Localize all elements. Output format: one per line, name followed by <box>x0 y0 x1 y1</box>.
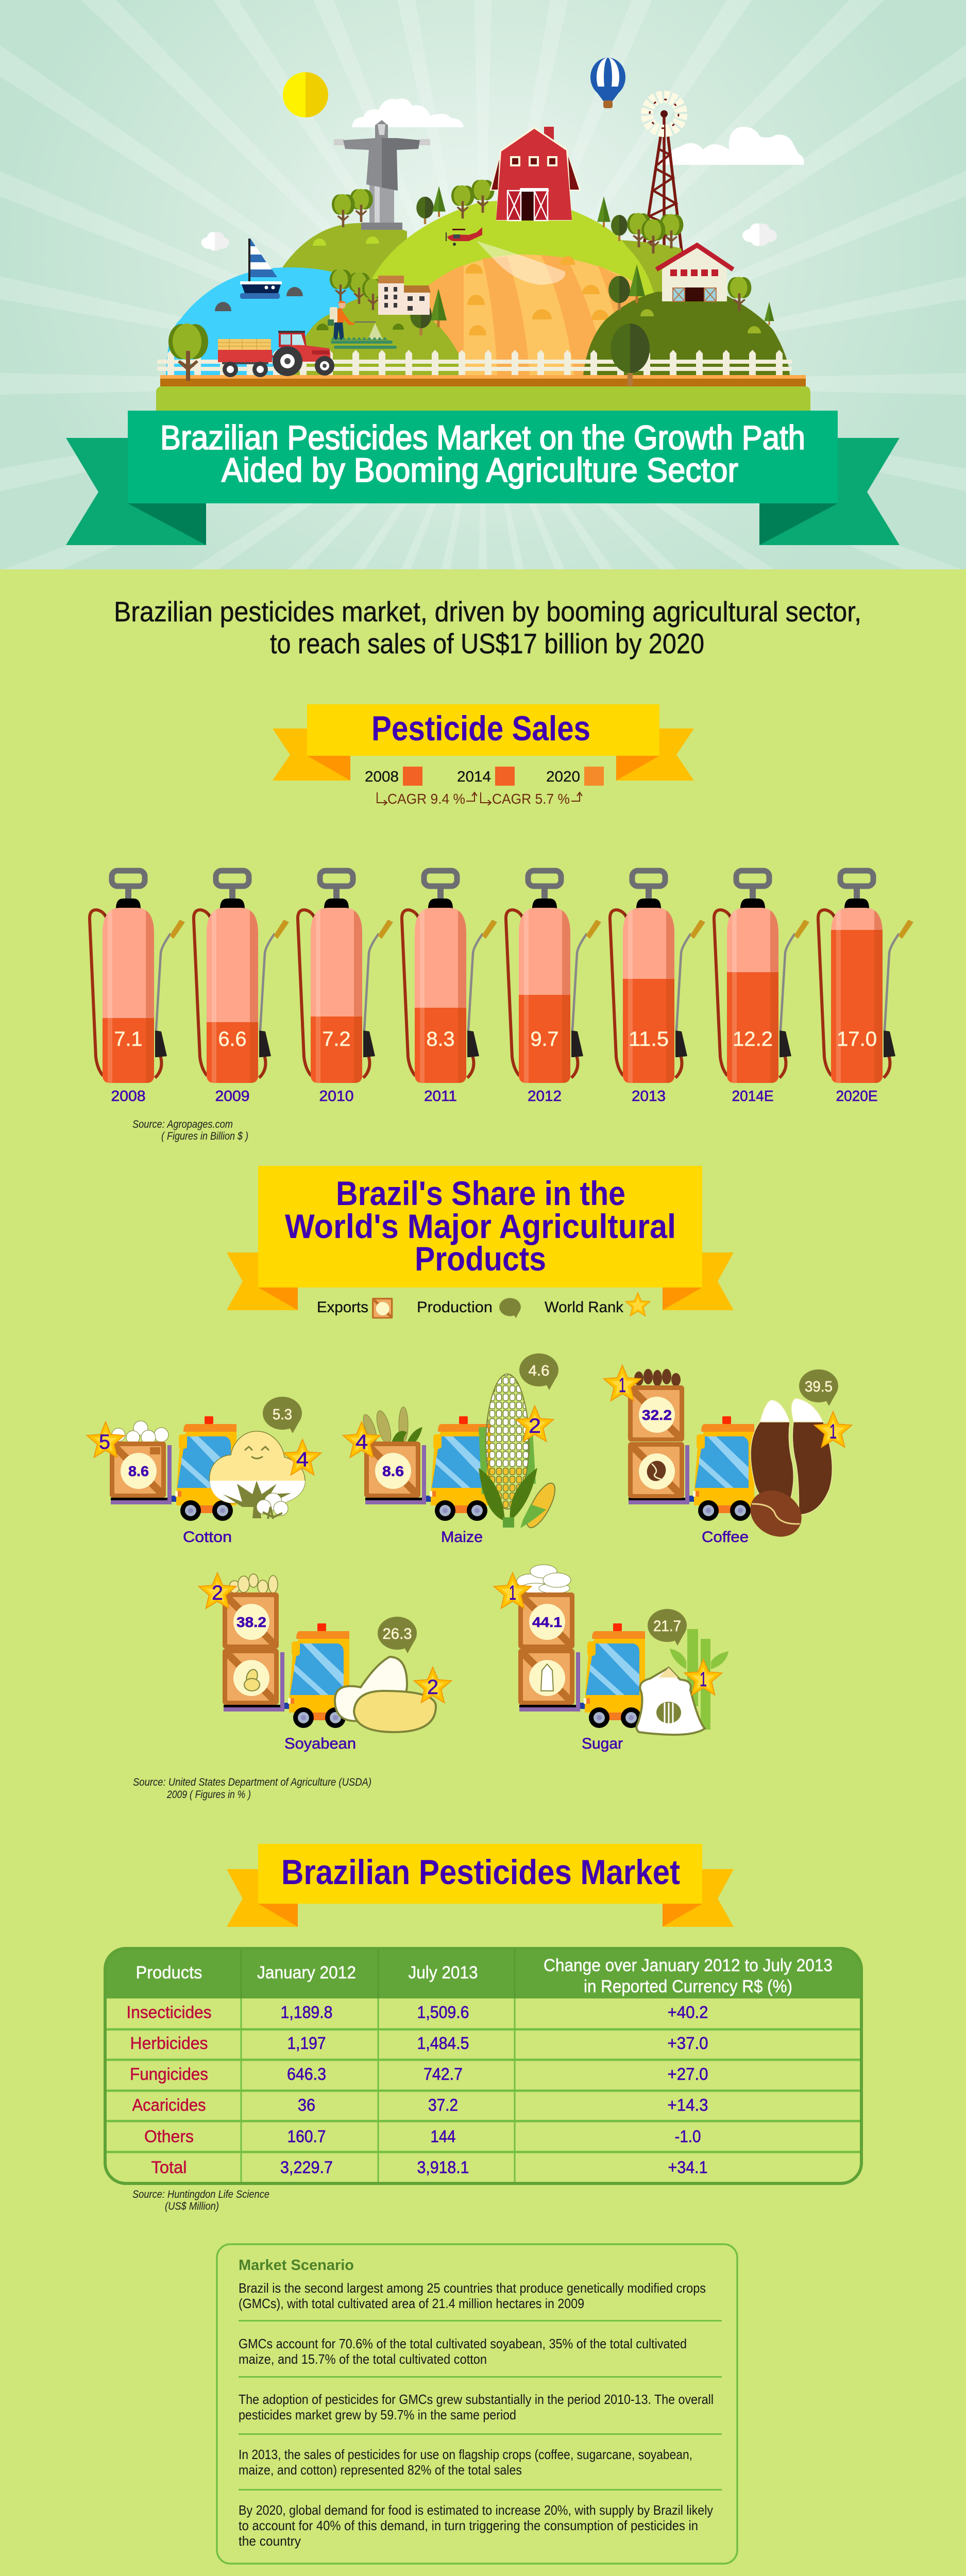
lower crate with soy icon <box>223 1649 279 1705</box>
production bubble: 39.5 <box>805 1379 833 1395</box>
rank star: production <box>516 1406 553 1442</box>
row: total: Total <box>151 2158 187 2177</box>
sprayer 2014E: 2014E <box>732 1088 774 1105</box>
small coffee bean <box>742 1482 810 1546</box>
legend: years: 2020 <box>546 769 580 785</box>
table header: July 2013 <box>408 1963 478 1982</box>
point 5: the country <box>239 2533 301 2549</box>
production bubble <box>799 1369 838 1406</box>
point 2 <box>239 2336 687 2367</box>
sprayer 2013: 2013 <box>632 1088 666 1105</box>
sugarcane <box>670 1629 728 1730</box>
dark right hill <box>583 292 790 375</box>
point 4: In 2013, the sales of pesticides for use on flagship crops (coffee, sugarcane, soyabean, <box>239 2447 692 2462</box>
biplane <box>446 227 482 246</box>
sprayer 2013: 11.5 <box>629 1028 669 1050</box>
heading: market scenario: Market Scenario <box>239 2257 354 2274</box>
product: coffee <box>604 1365 852 1546</box>
rank star: exports <box>604 1365 641 1401</box>
crate with exports value: 8.6 <box>128 1463 149 1479</box>
windmill tower <box>641 117 682 265</box>
crate with exports value <box>110 1442 166 1498</box>
source: Huntingdon: (US$ Million) <box>165 2200 219 2212</box>
row: acaricides <box>132 2095 708 2114</box>
sprayer 2011: 8.3 <box>427 1028 454 1050</box>
product: soyabean <box>199 1573 451 1752</box>
row: herbicides: +37.0 <box>668 2033 708 2053</box>
row: insecticides: +40.2 <box>668 2003 708 2022</box>
production bubble: 26.3 <box>382 1625 412 1642</box>
source: USDA: 2009 ( Figures in % ) <box>166 1789 251 1801</box>
corn cobs on crate <box>361 1407 422 1445</box>
hill mounds and rocks <box>215 236 761 333</box>
CAGR annotation: CAGR 9.4 % <box>387 791 465 807</box>
truck <box>519 1623 645 1728</box>
truck <box>629 1416 754 1521</box>
orange field <box>428 255 639 375</box>
rank star: exports: 1 <box>509 1582 516 1604</box>
product: maize: Maize <box>441 1529 483 1546</box>
panel: market scenario <box>217 2244 737 2564</box>
truck <box>224 1623 349 1728</box>
point 2: maize, and 15.7% of the total cultivated cotton <box>239 2351 487 2367</box>
ribbon tails <box>66 438 900 545</box>
subheading <box>114 596 861 659</box>
sprayer 2008: 2008 <box>111 1088 145 1105</box>
farmer spraying crops <box>328 301 383 340</box>
sky background with sun rays <box>0 0 966 569</box>
point 3 <box>239 2392 714 2422</box>
source: Huntingdon <box>132 2189 269 2212</box>
product: coffee: Coffee <box>702 1529 749 1546</box>
CAGR annotation: CAGR 5.7 % <box>492 791 570 807</box>
sprayer bar chart <box>90 871 913 1105</box>
point 1 <box>239 2280 706 2311</box>
rank star: exports: 5 <box>99 1431 110 1453</box>
upper crate with exports value: 32.2 <box>642 1407 672 1423</box>
soybean illustration <box>335 1657 436 1732</box>
row: others: -1.0 <box>675 2127 701 2146</box>
rank star: production: 1 <box>829 1420 837 1443</box>
rank star: production: 1 <box>700 1668 707 1691</box>
point 5: to account for 40% of this demand, in turn triggering the consumption of pesticides in <box>239 2518 698 2533</box>
small cloud right <box>742 224 777 246</box>
sprayer 2013 <box>610 871 705 1105</box>
cloud behind statue <box>352 98 464 127</box>
table frame <box>105 1948 861 2183</box>
sprayer 2011 <box>402 871 497 1105</box>
point 5 <box>239 2502 713 2549</box>
rank star: exports: 1 <box>619 1374 626 1397</box>
pesticide spray from plane <box>477 241 565 285</box>
point 4: maize, and cotton) represented 82% of the total sales <box>239 2462 522 2478</box>
point 3: pesticides market grew by 59.7% in the same period <box>239 2407 516 2422</box>
row: total <box>151 2158 708 2177</box>
tractor with hay trailer <box>218 331 334 377</box>
production bubble <box>648 1609 687 1646</box>
sprayer 2010 <box>298 871 393 1105</box>
legend: exports, production, world rank <box>317 1293 650 1318</box>
CAGR annotation <box>377 791 582 807</box>
product: maize <box>343 1353 561 1546</box>
cloud right <box>654 127 804 165</box>
crate with exports value <box>364 1442 420 1498</box>
rank star: production <box>414 1667 451 1703</box>
point 2: GMCs account for 70.6% of the total cultivated soyabean, 35% of the total cultivated <box>239 2336 687 2351</box>
row: insecticides: Insecticides <box>127 2003 211 2022</box>
table header: in Reported Currency R$ (%) <box>584 1977 792 1996</box>
main light green hill <box>372 200 655 375</box>
olive hill <box>282 223 407 319</box>
sprayer 2008: 7.1 <box>114 1028 142 1050</box>
sailboat <box>240 239 282 299</box>
sprayer 2009: 6.6 <box>218 1028 246 1050</box>
rank star: production: 2 <box>427 1676 438 1699</box>
rank star: exports: 2 <box>212 1582 223 1604</box>
row: acaricides: +14.3 <box>668 2095 708 2114</box>
row: total: +34.1 <box>668 2158 708 2177</box>
row: herbicides <box>130 2033 708 2053</box>
subheading: to reach sales of US$17 billion by 2020 <box>270 628 704 659</box>
point 1: Brazil is the second largest among 25 countries that produce genetically modified crops <box>239 2280 706 2296</box>
heading banner: Brazilian pesticides market: Brazilian Pesticides Market <box>281 1853 680 1892</box>
cotton character <box>210 1431 305 1519</box>
rank star: production: 4 <box>296 1448 309 1471</box>
row: insecticides: 1,509.6 <box>417 2003 469 2022</box>
row: herbicides: Herbicides <box>130 2033 208 2053</box>
back right hill <box>621 240 690 309</box>
tree in front left <box>168 324 208 381</box>
product: sugar <box>494 1565 728 1752</box>
fence <box>157 350 792 375</box>
row: total: 3,918.1 <box>417 2158 469 2177</box>
production bubble: 4.6 <box>529 1363 549 1379</box>
townhouse <box>378 276 431 315</box>
source: agropages: Source: Agropages.com <box>132 1118 233 1130</box>
rank star: exports <box>494 1573 531 1608</box>
row: acaricides: 36 <box>298 2095 315 2114</box>
panel: Brazilian pesticides market <box>105 1844 861 2212</box>
farmhouse <box>656 245 733 301</box>
upper crate with exports value <box>518 1592 574 1649</box>
product: soyabean: Soyabean <box>284 1735 356 1752</box>
sprayer 2014E: 12.2 <box>733 1028 773 1050</box>
row: acaricides: 37.2 <box>428 2095 458 2114</box>
source: USDA <box>133 1776 371 1801</box>
main title <box>160 418 805 489</box>
rank star: exports: 4 <box>355 1431 368 1453</box>
row: fungicides: 742.7 <box>423 2064 463 2083</box>
row: fungicides: 646.3 <box>287 2064 326 2083</box>
hero illustration <box>156 58 810 411</box>
legend: exports, production, world rank: World Rank <box>545 1299 624 1316</box>
heading banner: Brazil's share <box>227 1166 734 1310</box>
platform <box>156 386 810 411</box>
sprayer 2009 <box>194 871 289 1105</box>
sprayer 2012 <box>506 871 601 1105</box>
rank star: exports <box>343 1422 380 1458</box>
product: cotton <box>87 1397 321 1546</box>
coffee beans on crates <box>634 1369 681 1386</box>
heading banner: pesticide sales: Pesticide Sales <box>371 709 590 748</box>
barn <box>489 127 581 221</box>
heading banner: Brazil's share: World's Major Agricultural <box>285 1207 676 1245</box>
hay mounds on field <box>465 256 609 335</box>
upper crate with exports value: 38.2 <box>236 1614 266 1630</box>
sprayer 2010: 7.2 <box>323 1028 350 1050</box>
sprayer 2011: 2011 <box>424 1088 457 1105</box>
row: fungicides <box>130 2064 708 2083</box>
sprayer 2012: 9.7 <box>531 1028 558 1050</box>
rank star: production: 2 <box>529 1415 541 1437</box>
row: fungicides: Fungicides <box>130 2064 208 2083</box>
production bubble <box>378 1617 417 1653</box>
table header <box>136 1956 833 1996</box>
rank star: production <box>284 1439 321 1475</box>
front olive hill <box>289 296 464 375</box>
sprayer 2020E: 2020E <box>836 1088 878 1105</box>
upper crate with exports value: 44.1 <box>532 1614 562 1630</box>
row: insecticides <box>127 2003 708 2022</box>
main title: Aided by Booming Agriculture Sector <box>222 451 738 489</box>
small cloud left <box>201 232 229 251</box>
truck <box>365 1416 491 1521</box>
legend: years: 2014 <box>457 769 491 785</box>
crate with exports value: 8.6 <box>382 1463 404 1479</box>
truck <box>111 1416 236 1521</box>
coffee bean illustration <box>751 1398 832 1515</box>
sprayer 2014E <box>714 871 809 1105</box>
panel: Brazil's share <box>87 1166 852 1801</box>
heading banner: Brazil's share: Products <box>415 1240 546 1278</box>
row: herbicides: 1,197 <box>287 2033 326 2053</box>
row: others: 144 <box>431 2127 455 2146</box>
point 4 <box>239 2447 692 2478</box>
sprayer 2010: 2010 <box>319 1088 353 1105</box>
product: sugar: Sugar <box>582 1735 623 1752</box>
trees on hills <box>330 180 774 335</box>
windmill wheel <box>647 97 681 131</box>
corn illustration <box>479 1374 561 1531</box>
lower crate with sack icon <box>518 1649 574 1705</box>
row: fungicides: +27.0 <box>668 2064 708 2083</box>
rank star: production <box>815 1412 852 1447</box>
ground strip <box>160 375 806 386</box>
rank star: production <box>685 1659 722 1695</box>
table header: Products <box>136 1963 202 1982</box>
heading banner: pesticide sales <box>273 704 694 781</box>
table <box>105 1948 861 2183</box>
sprayer 2008 <box>90 871 185 1105</box>
rank star: exports <box>87 1422 124 1458</box>
row: acaricides: Acaricides <box>132 2095 206 2114</box>
table header: January 2012 <box>257 1963 356 1982</box>
production bubble <box>263 1397 302 1433</box>
sprayer 2009: 2009 <box>215 1088 249 1105</box>
legend: years: 2008 <box>365 769 399 785</box>
cotton bolls on crate <box>112 1421 168 1445</box>
row: insecticides: 1,189.8 <box>280 2003 333 2022</box>
statue <box>334 120 430 230</box>
rank star: exports <box>199 1573 236 1608</box>
heading banner: Brazilian pesticides market <box>227 1844 734 1927</box>
hot air balloon <box>590 58 625 108</box>
production bubble: 21.7 <box>653 1618 681 1635</box>
row: others <box>144 2127 701 2146</box>
crop row <box>331 337 397 349</box>
water <box>166 267 361 375</box>
row: others: 160.7 <box>287 2127 326 2146</box>
row: total: 3,229.7 <box>280 2158 333 2177</box>
production bubble <box>519 1353 558 1390</box>
table header: Change over January 2012 to July 2013 <box>544 1956 833 1975</box>
sprayer 2020E <box>818 871 913 1105</box>
point 5: By 2020, global demand for food is estimated to increase 20%, with supply by Brazil likely <box>239 2502 713 2518</box>
row: herbicides: 1,484.5 <box>417 2033 469 2053</box>
upper crate with exports value <box>223 1592 279 1649</box>
source: Huntingdon: Source: Huntingdon Life Science <box>132 2189 269 2200</box>
heading banner: Brazil's share: Brazil's Share in the <box>336 1174 625 1212</box>
sugar sack <box>636 1668 705 1735</box>
upper crate with exports value <box>628 1385 684 1442</box>
point 1: (GMCs), with total cultivated area of 21.4 million hectares in 2009 <box>239 2296 584 2311</box>
source: agropages: ( Figures in Billion $ ) <box>161 1130 248 1142</box>
sprayer 2020E: 17.0 <box>837 1028 877 1050</box>
main title: Brazilian Pesticides Market on the Growth Path <box>160 418 805 456</box>
production bubble: 5.3 <box>273 1406 292 1423</box>
source: agropages <box>132 1118 248 1142</box>
lower crate with bean icon <box>628 1442 684 1498</box>
row: others: Others <box>144 2127 194 2146</box>
sprayer 2012: 2012 <box>528 1088 562 1105</box>
panel: pesticide sales <box>90 704 913 1142</box>
source: USDA: Source: United States Department of Agriculture (USDA) <box>133 1776 371 1788</box>
legend: exports, production, world rank: Exports <box>317 1299 368 1316</box>
legend: years <box>365 767 604 786</box>
legend: exports, production, world rank: Production <box>417 1299 493 1316</box>
subheading: Brazilian pesticides market, driven by booming agricultural sector, <box>114 596 861 628</box>
tree in front right <box>611 324 650 386</box>
soybeans on crates <box>229 1574 278 1594</box>
product: cotton: Cotton <box>183 1529 232 1546</box>
sun <box>283 72 328 117</box>
title ribbon <box>66 411 900 545</box>
point 3: The adoption of pesticides for GMCs grew substantially in the period 2010-13. The overall <box>239 2392 714 2407</box>
sugar heaps on crates <box>517 1565 571 1594</box>
